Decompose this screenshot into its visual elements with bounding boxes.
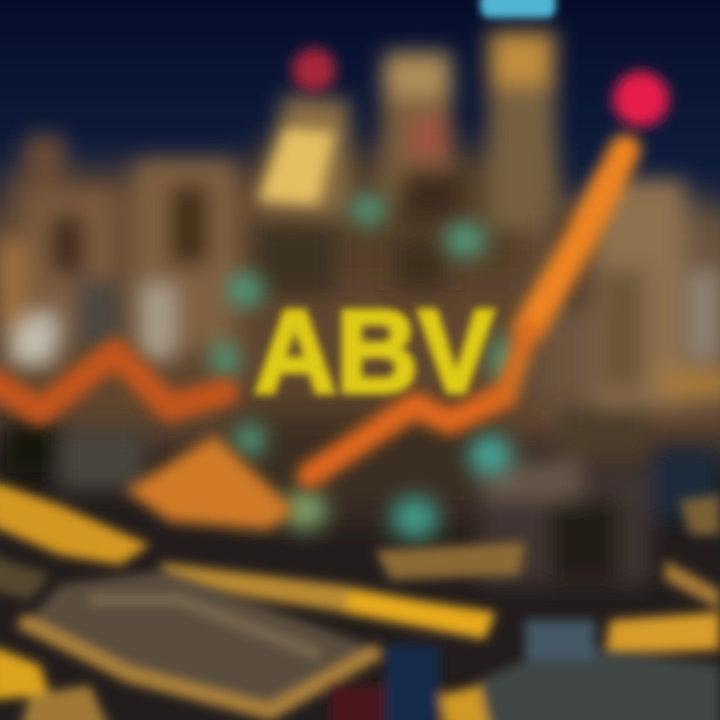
pink marker at chart peak xyxy=(613,71,669,127)
bottom right tray xyxy=(330,620,720,720)
central towers xyxy=(255,30,556,295)
ABV heading: ABV xyxy=(254,286,494,418)
lower-left gold blocks xyxy=(0,555,110,720)
keyboard tray xyxy=(20,570,380,712)
red beacon left xyxy=(292,48,336,92)
teal chart dots xyxy=(211,195,519,540)
blue beacon top xyxy=(480,0,556,18)
orange wedge lower left xyxy=(125,435,295,530)
left buildings xyxy=(0,135,235,490)
city mass of brown buildings xyxy=(0,150,720,720)
orange trend line xyxy=(0,150,625,475)
lower platforms xyxy=(0,480,720,720)
right buildings xyxy=(480,180,720,585)
lit tower window xyxy=(258,128,335,205)
